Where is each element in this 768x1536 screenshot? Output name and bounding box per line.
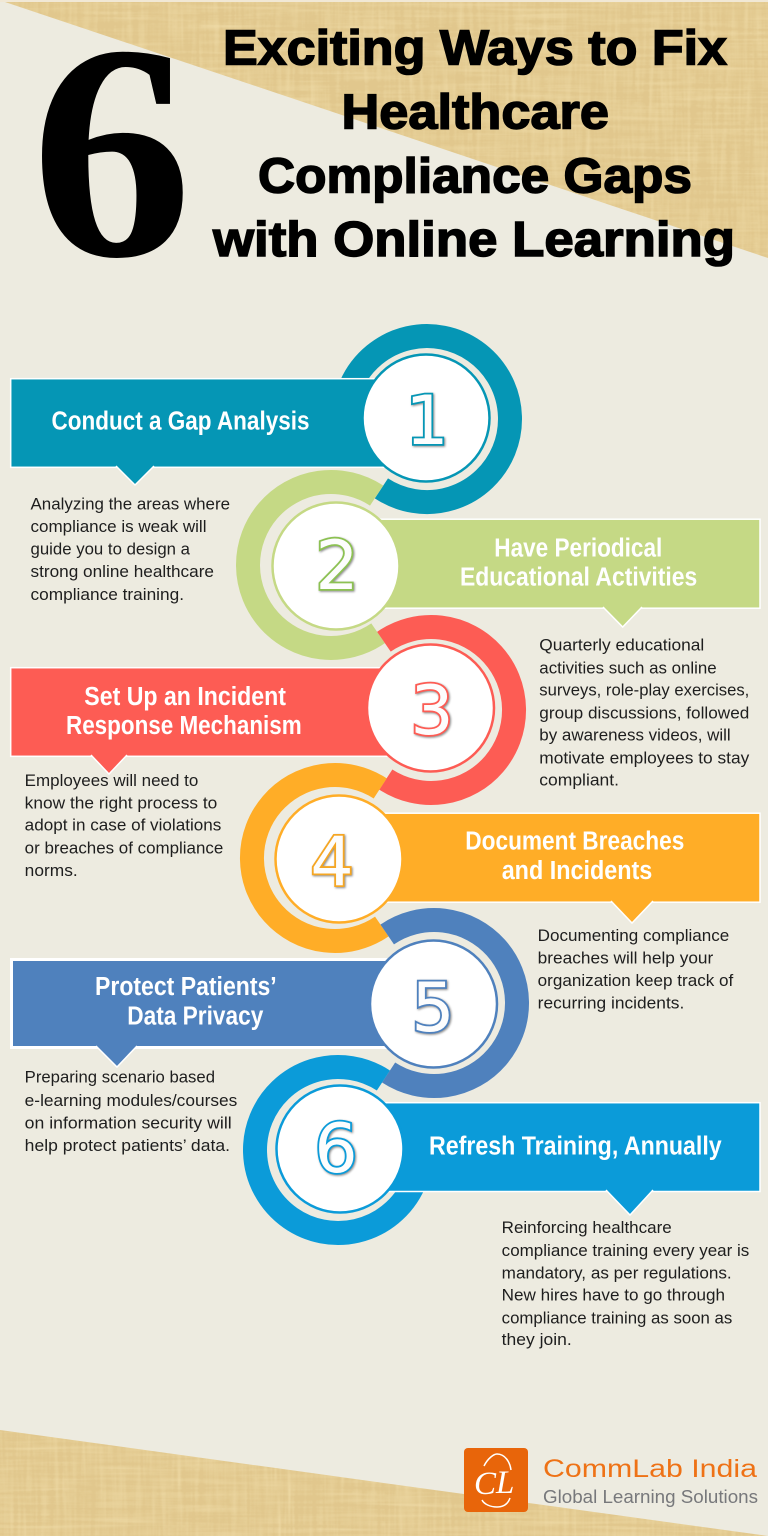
logo mark bbox=[464, 1448, 528, 1512]
description 6: Reinforcing healthcare bbox=[502, 1219, 672, 1237]
description 2: Quarterly educational bbox=[539, 637, 704, 655]
banner 2 bbox=[336, 519, 760, 627]
description 3: or breaches of compliance bbox=[25, 839, 223, 857]
logo name: CommLab India bbox=[543, 1455, 757, 1483]
ring 1 bbox=[344, 336, 510, 502]
number circle 2 bbox=[272, 502, 400, 630]
description 5: help protect patients’ data. bbox=[25, 1137, 230, 1155]
description 6: New hires have to go through bbox=[502, 1287, 725, 1305]
description 4 bbox=[538, 927, 734, 1012]
banner 5 bbox=[12, 960, 434, 1067]
ring 2 bbox=[248, 482, 378, 648]
number circle 1 bbox=[362, 354, 490, 482]
description 5 bbox=[25, 1069, 237, 1155]
number circle 6 bbox=[276, 1086, 404, 1212]
banner 3: Response Mechanism bbox=[66, 712, 302, 740]
step 5 bbox=[12, 920, 517, 1155]
description 2: surveys, role-play exercises, bbox=[539, 682, 749, 700]
ring 3 bbox=[384, 627, 514, 793]
description 3: norms. bbox=[25, 862, 78, 880]
step 1 bbox=[11, 336, 510, 604]
description 3 bbox=[25, 772, 223, 880]
description 1: strong online healthcare bbox=[30, 563, 214, 581]
banner 6 bbox=[340, 1103, 760, 1215]
description 6: compliance training as soon as bbox=[502, 1309, 732, 1327]
description 6: mandatory, as per regulations. bbox=[502, 1264, 732, 1282]
banner 4: Document Breaches bbox=[465, 828, 684, 856]
ring 5 bbox=[387, 920, 517, 1086]
number circle 4 bbox=[276, 796, 402, 922]
top paper texture triangle bbox=[0, 0, 768, 260]
title bbox=[212, 22, 735, 267]
step 4 bbox=[252, 775, 760, 1012]
description 3: know the right process to bbox=[25, 794, 217, 812]
banner 5: Protect Patients’ bbox=[95, 973, 277, 1001]
banner 4: and Incidents bbox=[502, 857, 652, 885]
description 1: compliance is weak will bbox=[30, 518, 206, 536]
description 6: compliance training every year is bbox=[502, 1242, 749, 1260]
step 6 bbox=[255, 1067, 760, 1349]
banner 3: Set Up an Incident bbox=[84, 683, 286, 711]
logo tagline: Global Learning Solutions bbox=[543, 1487, 758, 1507]
number circle 2: 2 bbox=[315, 527, 359, 606]
title: with Online Learning bbox=[212, 213, 735, 267]
bottom paper texture triangle bbox=[0, 1428, 768, 1536]
description 4: breaches will help your bbox=[538, 950, 714, 968]
description 5: on information security will bbox=[25, 1114, 232, 1132]
ring 6 bbox=[255, 1067, 421, 1233]
number circle 3 bbox=[367, 644, 494, 772]
banner 1 bbox=[11, 379, 427, 485]
logo: CommLab India bbox=[464, 1448, 758, 1512]
description 5: e-learning modules/courses bbox=[25, 1092, 237, 1110]
banner 5: Data Privacy bbox=[127, 1002, 264, 1030]
description 2: motivate employees to stay bbox=[539, 749, 750, 767]
description 1: guide you to design a bbox=[30, 541, 191, 559]
description 1 bbox=[30, 496, 230, 604]
description 3: Employees will need to bbox=[25, 772, 198, 790]
banner 2: Have Periodical bbox=[494, 535, 662, 563]
description 2: activities such as online bbox=[539, 659, 717, 677]
logo mark: L bbox=[495, 1465, 514, 1501]
title: Healthcare bbox=[342, 86, 609, 140]
number circle 6: 6 bbox=[314, 1110, 358, 1189]
banner 4 bbox=[339, 813, 760, 923]
logo mark: C bbox=[474, 1466, 497, 1502]
banner 3 bbox=[11, 668, 431, 774]
description 3: adopt in case of violations bbox=[25, 817, 221, 835]
banner 6: Refresh Training, Annually bbox=[429, 1132, 722, 1160]
description 2: compliant. bbox=[539, 772, 619, 790]
description 4: Documenting compliance bbox=[538, 927, 729, 945]
banner 1: Conduct a Gap Analysis bbox=[52, 408, 310, 436]
description 6 bbox=[502, 1219, 749, 1349]
number circle 5 bbox=[370, 940, 497, 1068]
title: Compliance Gaps bbox=[258, 150, 692, 204]
number circle 5: 5 bbox=[411, 969, 455, 1048]
description 4: recurring incidents. bbox=[538, 994, 684, 1012]
description 1: compliance training. bbox=[30, 586, 184, 604]
number circle 4: 4 bbox=[310, 823, 354, 902]
number circle 3: 3 bbox=[410, 672, 454, 751]
description 2: group discussions, followed bbox=[539, 704, 749, 722]
description 2 bbox=[539, 637, 750, 790]
step 2 bbox=[248, 482, 760, 790]
description 6: they join. bbox=[502, 1331, 572, 1349]
banner 2: Educational Activities bbox=[460, 563, 697, 591]
ring 4 bbox=[252, 775, 382, 941]
description 2: by awareness videos, will bbox=[539, 727, 731, 745]
number circle 1: 1 bbox=[405, 382, 449, 461]
description 4: organization keep track of bbox=[538, 972, 734, 990]
description 5: Preparing scenario based bbox=[25, 1069, 215, 1087]
step 3 bbox=[11, 627, 514, 880]
description 1: Analyzing the areas where bbox=[30, 496, 230, 514]
title: Exciting Ways to Fix bbox=[223, 22, 727, 76]
